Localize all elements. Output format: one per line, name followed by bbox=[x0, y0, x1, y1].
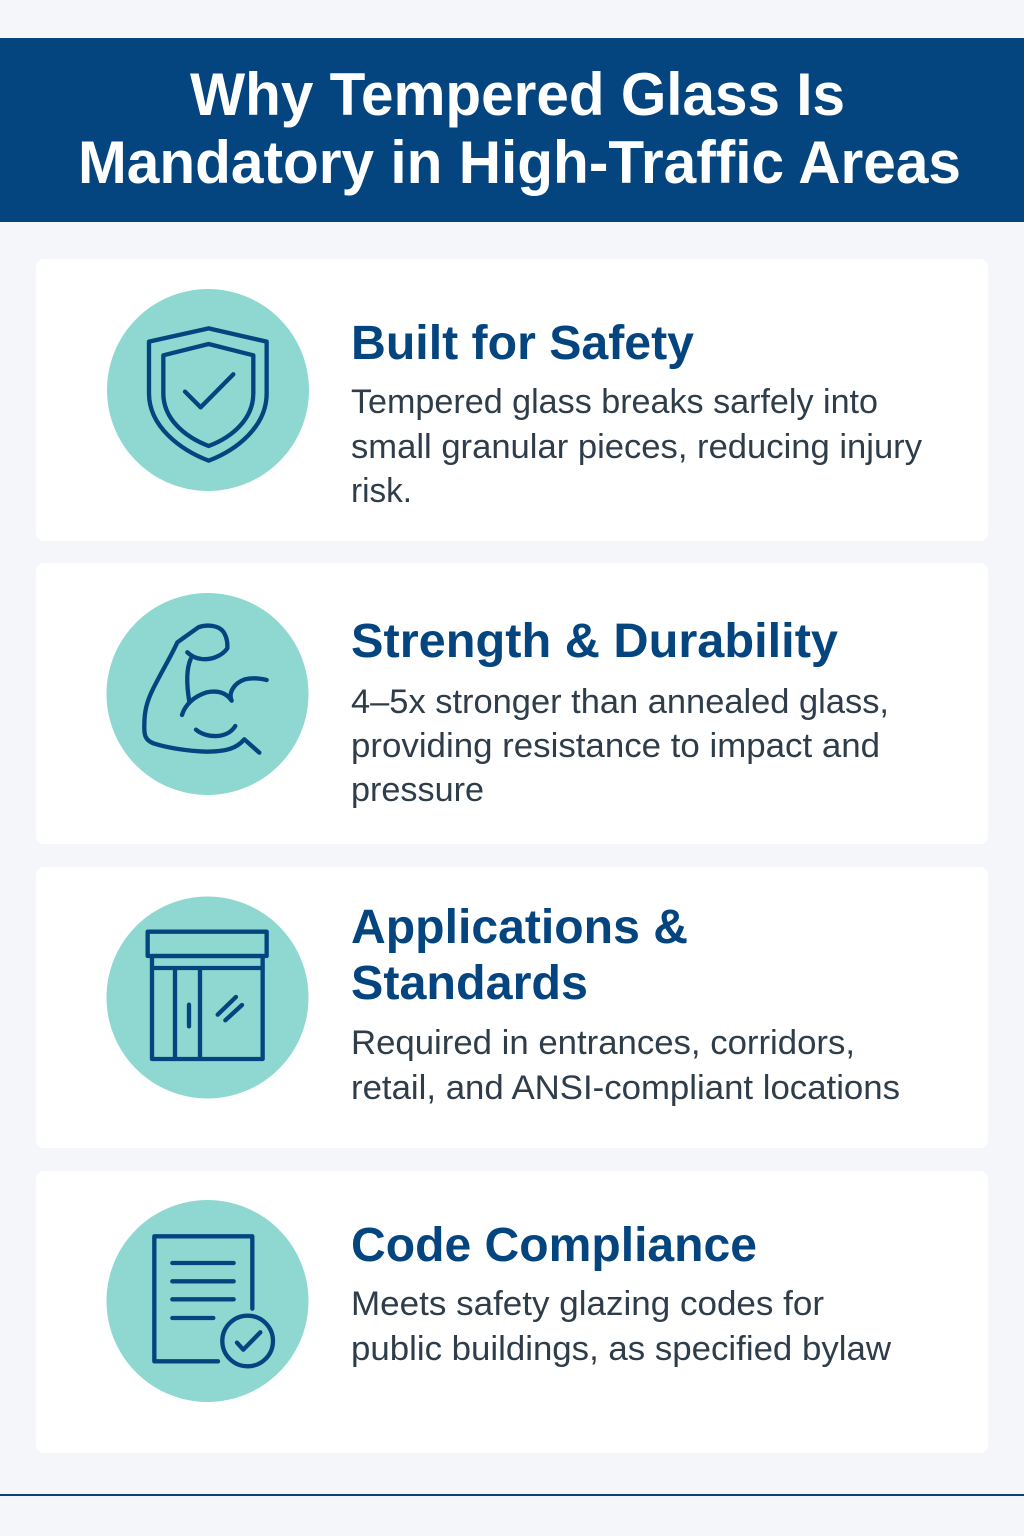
heading: applications and standards bbox=[351, 901, 688, 1010]
heading: applications and standards: Applications & bbox=[351, 901, 688, 954]
text: applications and standards bbox=[351, 1024, 900, 1107]
text: strength and durability: pressure bbox=[351, 771, 484, 809]
icon: document with check bbox=[106, 1200, 308, 1402]
title: Mandatory in High-Traffic Areas bbox=[78, 129, 961, 196]
text: applications and standards: Required in entrances, corridors, bbox=[351, 1024, 855, 1062]
text: strength and durability bbox=[351, 683, 889, 809]
icon: storefront door bbox=[106, 896, 308, 1098]
text: applications and standards: retail, and ANSI-compliant locations bbox=[351, 1069, 900, 1107]
text: built for safety: small granular pieces, reducing injury bbox=[351, 428, 922, 466]
icon: flexed arm bbox=[106, 593, 308, 795]
heading: strength and durability: Strength & Durability bbox=[351, 615, 838, 668]
text: built for safety bbox=[351, 383, 922, 510]
panel: strength and durability bbox=[36, 563, 988, 844]
heading: built for safety: Built for Safety bbox=[351, 317, 694, 370]
text: code compliance bbox=[351, 1285, 891, 1368]
text: code compliance: public buildings, as specified bylaw bbox=[351, 1330, 891, 1368]
panel: applications and standards bbox=[36, 867, 988, 1148]
title bbox=[78, 61, 961, 196]
text: code compliance: Meets safety glazing codes for bbox=[351, 1285, 824, 1323]
text: built for safety: Tempered glass breaks sarfely into bbox=[351, 383, 878, 421]
panel: built for safety bbox=[36, 259, 988, 541]
text: built for safety: risk. bbox=[351, 472, 412, 510]
title banner bbox=[0, 38, 1024, 222]
panel: code compliance bbox=[36, 1171, 988, 1453]
heading: code compliance: Code Compliance bbox=[351, 1219, 757, 1272]
text: strength and durability: providing resistance to impact and bbox=[351, 727, 880, 765]
icon: shield with check bbox=[107, 289, 309, 491]
heading: applications and standards: Standards bbox=[351, 957, 588, 1010]
title: Why Tempered Glass Is bbox=[190, 61, 845, 128]
text: strength and durability: 4–5x stronger than annealed glass, bbox=[351, 683, 889, 721]
